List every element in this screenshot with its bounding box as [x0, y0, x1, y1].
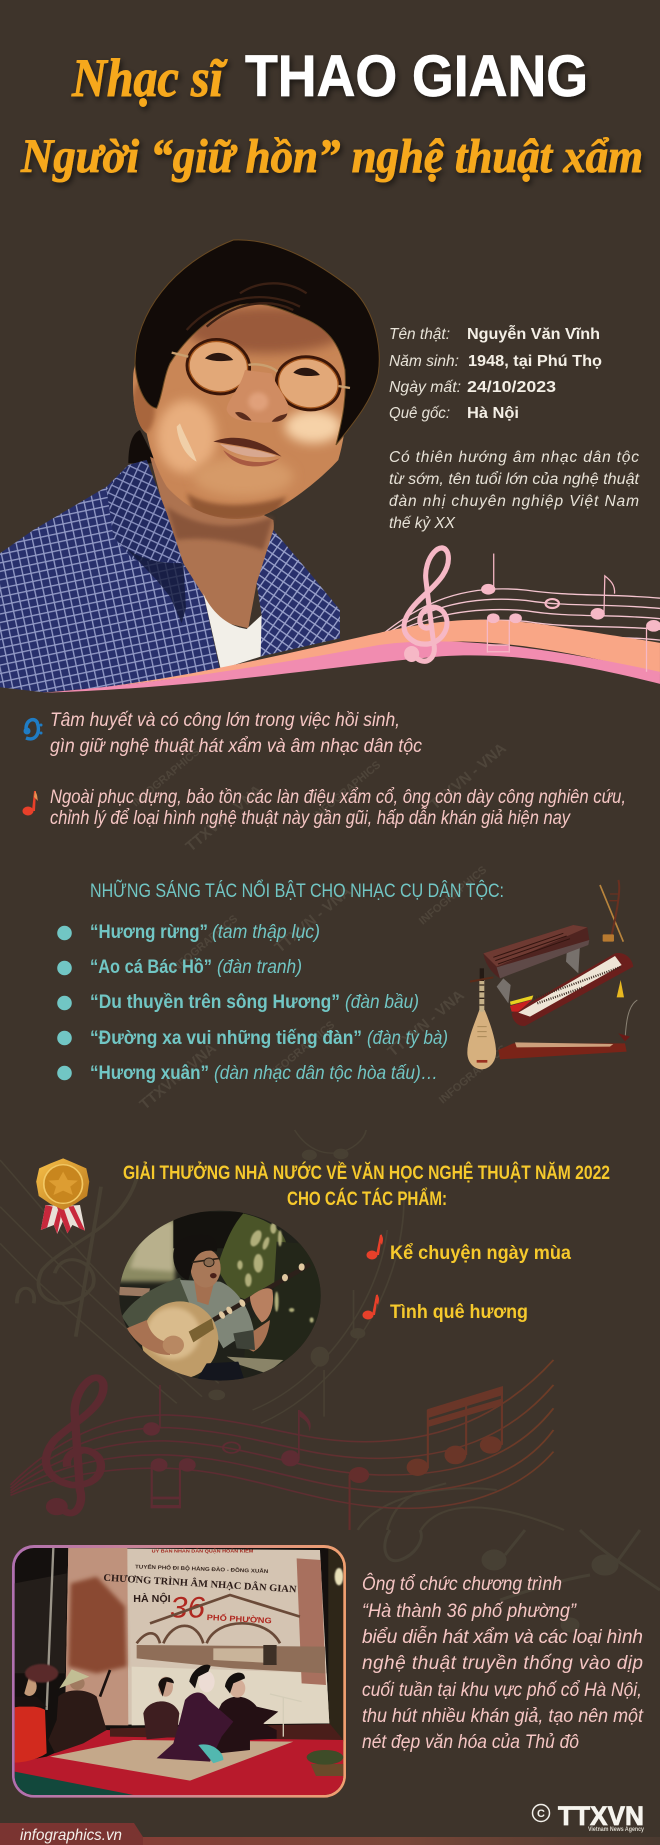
decorative faint watermarks: INFOGRAPHICS	[417, 864, 489, 927]
TTXVN logo: Vietnam News Agency	[588, 1827, 645, 1833]
dark shirt opening	[117, 538, 186, 623]
hair	[173, 1248, 217, 1280]
frame	[12, 1545, 346, 1798]
fan	[198, 1744, 223, 1763]
bottom bar	[0, 1823, 660, 1845]
treble clef	[404, 548, 448, 662]
note stem down	[349, 1467, 369, 1530]
chest	[180, 1280, 254, 1348]
thirty-six string zither	[483, 925, 589, 1003]
decorative faint watermarks: INFOGRAPHICS	[437, 1043, 509, 1106]
fringe strands	[187, 283, 307, 330]
banner right panel	[297, 1558, 326, 1685]
item 4: (đàn tỳ bà)	[367, 1028, 448, 1049]
right dark wall	[328, 1548, 343, 1741]
closing text: cuối tuần tại khu vực phố cổ Hà Nội,	[362, 1680, 642, 1701]
closing text: “Hà thành 36 phố phường”	[362, 1601, 578, 1622]
closing text: biểu diễn hát xẩm và các loại hình	[362, 1627, 643, 1648]
row: home town: Hà Nội	[467, 405, 519, 422]
beamed notes down	[151, 1458, 196, 1508]
main singer	[157, 1692, 233, 1762]
closing text: thu hút nhiều khán giả, tạo nên một	[362, 1706, 644, 1727]
forehead shade	[187, 307, 347, 353]
item 5: (dàn nhạc dân tộc hòa tấu)…	[214, 1063, 438, 1084]
lower banner	[132, 1667, 329, 1725]
item 3: “Du thuyền trên sông Hương”	[90, 992, 340, 1013]
left shirt	[0, 460, 220, 692]
mouth	[213, 438, 282, 457]
chin area	[193, 457, 293, 497]
row: real name: Nguyễn Văn Vĩnh	[467, 326, 600, 343]
state award heading: CHO CÁC TÁC PHẨM:	[287, 1188, 447, 1210]
red stage	[15, 1730, 343, 1795]
faint background notes behind closing text	[385, 1530, 660, 1631]
photo: Ha Noi 36 pho phuong performance: 36	[170, 1591, 205, 1624]
eighth note	[281, 1410, 311, 1466]
neck	[194, 1280, 213, 1305]
callout: research	[22, 787, 626, 829]
microphone stand	[270, 1694, 302, 1737]
title	[20, 44, 643, 183]
decorative faint watermarks: TTXVN - VNA	[137, 1040, 220, 1113]
item 2	[57, 957, 302, 978]
item 4: “Đường xa vui những tiếng đàn”	[90, 1028, 362, 1049]
row: death date: 24/10/2023	[467, 379, 556, 396]
item 1: (tam thập lục)	[212, 922, 320, 943]
nostrils	[235, 412, 287, 422]
faint background music notes	[0, 1130, 564, 1530]
back hair at neck	[128, 430, 157, 463]
photo: Ha Noi 36 pho phuong performance: HÀ NỘI	[133, 1592, 171, 1605]
smile fold	[177, 423, 197, 462]
state award heading	[123, 1162, 610, 1210]
neck	[150, 457, 274, 628]
chin crease	[187, 493, 287, 521]
biography paragraph: thế kỷ XX	[389, 515, 456, 532]
decorative faint watermarks: INFOGRAPHICS	[168, 913, 240, 976]
row: birth year: Năm sinh:	[389, 353, 459, 370]
callout: dedication	[24, 710, 422, 757]
TTXVN logo: C	[537, 1808, 545, 1820]
flowers behind	[25, 1664, 58, 1683]
work 1: Kể chuyện ngày mùa	[390, 1243, 571, 1264]
notes	[481, 554, 660, 672]
banner left panel	[65, 1548, 128, 1725]
row: real name	[389, 326, 600, 343]
banner	[65, 1548, 329, 1725]
collar	[107, 460, 183, 563]
closing text: Ông tổ chức chương trình	[362, 1573, 562, 1595]
sun flecks	[237, 1223, 314, 1323]
ground	[227, 1357, 283, 1373]
icon: bass clef	[24, 720, 42, 739]
trousers	[197, 1362, 245, 1382]
works list	[362, 1234, 571, 1323]
cheek light right	[285, 410, 342, 443]
glasses	[183, 335, 344, 414]
item 2: “Ao cá Bác Hồ”	[90, 957, 212, 978]
face	[133, 304, 345, 519]
personal details	[389, 326, 602, 422]
traditional instruments illustration	[467, 880, 637, 1069]
row: death date	[389, 379, 556, 396]
plucking arm	[127, 1320, 170, 1355]
photo: Ha Noi 36 pho phuong performance: CHƯƠNG TRÌNH ÂM NHẠC DÂN GIAN	[103, 1572, 298, 1596]
zither with white soundboard	[510, 953, 633, 1026]
row: real name: Tên thật:	[389, 326, 450, 343]
closing text	[362, 1573, 644, 1753]
seated woman	[143, 1701, 179, 1739]
work 1	[366, 1234, 571, 1264]
light patch	[130, 1222, 173, 1272]
item 1: “Hương rừng”	[90, 922, 208, 943]
TTXVN logo: TTXVN	[558, 1801, 644, 1831]
fretting hand	[250, 1288, 273, 1322]
decorative faint watermarks	[130, 740, 510, 1113]
decorative faint watermarks: INFOGRAPHICS	[130, 746, 202, 809]
closing text: nghệ thuật truyền thống vào dịp	[362, 1653, 643, 1674]
decorative faint watermarks: INFOGRAPHICS	[311, 759, 383, 822]
foliage	[274, 1242, 287, 1282]
red drum	[15, 1706, 47, 1763]
white tee	[203, 593, 262, 669]
glasses	[192, 1258, 220, 1262]
tuning pegs	[218, 1263, 305, 1320]
tree trunk	[220, 1214, 286, 1300]
arm right	[248, 1320, 270, 1352]
nose	[227, 370, 288, 423]
pole	[47, 1548, 53, 1710]
item 1	[57, 922, 320, 943]
icon: gold medal	[36, 1158, 89, 1234]
flower basket	[311, 1764, 343, 1776]
left lens	[183, 335, 253, 398]
work 2: Tình quê hương	[390, 1302, 528, 1323]
callout: research: chỉnh lý để loại hình nghệ thuật này gần gũi, hấp dẫn khán giả hiện nay	[50, 808, 571, 829]
left building	[15, 1573, 67, 1673]
peach wave and staff decoration	[42, 548, 660, 693]
tab	[0, 1823, 143, 1845]
open mouth	[210, 1273, 217, 1278]
open note	[223, 1442, 240, 1453]
item 5: “Hương xuân”	[90, 1063, 209, 1084]
top staff lines	[375, 589, 660, 644]
photo: Ha Noi 36 pho phuong performance: TUYẾN PHỐ ĐI BỘ HÀNG ĐÀO - ĐỒNG XUÂN	[135, 1562, 269, 1575]
decorative faint watermarks: TTXVN - VNA	[385, 987, 468, 1060]
pink band	[42, 641, 660, 693]
beamed triple notes	[407, 1386, 503, 1476]
row: home town	[389, 405, 519, 422]
right lamp	[335, 1568, 343, 1585]
hair	[135, 240, 379, 445]
compositions list	[57, 922, 448, 1084]
lens rim warm tint	[185, 337, 342, 412]
icon: red note	[22, 791, 38, 816]
left arm and shoulder	[122, 1278, 189, 1328]
dark doorway	[173, 1212, 245, 1248]
sunlit background	[117, 1215, 175, 1282]
title name: THAO GIANG	[245, 44, 588, 109]
right shirt	[257, 530, 340, 657]
biography paragraph: đàn nhị chuyên nghiệp Việt Nam	[389, 493, 639, 510]
monochord	[498, 1000, 637, 1059]
clef foot	[46, 1498, 68, 1515]
lute neck	[213, 1264, 310, 1320]
right lens	[273, 352, 344, 414]
decorative faint watermarks: TTXVN - VNA	[272, 883, 355, 956]
red-tan ledge	[117, 1287, 150, 1297]
row: home town: Quê gốc:	[389, 405, 450, 422]
decorative faint watermarks: TTXVN - VNA	[183, 782, 266, 855]
neck shadow	[167, 507, 273, 550]
site label: infographics.vn	[20, 1827, 122, 1844]
banner headline: UỶ BAN NHÂN DÂN QUẬN HOÀN KIẾM	[152, 1548, 253, 1555]
staff lines	[11, 1360, 553, 1508]
glasses bridge and arms	[172, 353, 350, 388]
decorative faint watermarks: INFOGRAPHICS	[265, 1019, 337, 1082]
pipa lute	[467, 968, 496, 1069]
peach band	[55, 620, 660, 692]
cheek light left	[157, 400, 217, 473]
portrait of Thao Giang	[0, 240, 379, 692]
green skirt	[15, 1772, 133, 1795]
eyes	[205, 353, 320, 376]
item 3: (đàn bầu)	[345, 992, 419, 1013]
heading: notable compositions: NHỮNG SÁNG TÁC NỔI BẬT CHO NHẠC CỤ DÂN TỘC:	[90, 880, 504, 902]
second singer	[203, 1697, 278, 1753]
row: birth year	[389, 353, 602, 370]
callout: dedication: Tâm huyết và có công lớn trong việc hồi sinh,	[50, 710, 400, 731]
work 2	[362, 1294, 528, 1323]
stage back band	[110, 1724, 343, 1740]
ear and side shade	[132, 380, 155, 433]
callout: dedication: gìn giữ nghệ thuật hát xẩm và âm nhạc dân tộc	[50, 736, 422, 757]
biography paragraph: từ sớm, tên tuổi lớn của nghệ thuật	[389, 471, 640, 488]
photo: Ha Noi 36 pho phuong performance	[12, 1545, 346, 1798]
title line 1 label: Nhạc sĩ	[71, 48, 227, 108]
large dark staff with notes	[11, 1360, 553, 1530]
quarter note	[143, 1385, 161, 1436]
erhu	[600, 880, 623, 942]
treble clef	[46, 1378, 103, 1513]
row: birth year: 1948, tại Phú Thọ	[468, 353, 602, 370]
item 5	[57, 1063, 438, 1084]
decorative faint watermarks: TTXVN - VNA	[427, 740, 510, 813]
photo: Ha Noi 36 pho phuong performance: PHỐ PHƯỜNG	[207, 1612, 272, 1625]
row: death date: Ngày mất:	[389, 379, 461, 396]
biography paragraph: Có thiên hướng âm nhạc dân tộc	[389, 449, 639, 466]
circular photo: musician with lute	[117, 1208, 323, 1385]
closing text: nét đẹp văn hóa của Thủ đô	[362, 1732, 579, 1753]
face	[191, 1249, 221, 1288]
left man	[15, 1697, 47, 1707]
seated musician with hat	[48, 1690, 107, 1753]
lute body	[142, 1301, 218, 1379]
carpet	[50, 1740, 293, 1781]
frets	[189, 1318, 214, 1342]
item 2: (đàn tranh)	[217, 957, 302, 978]
station base	[137, 1645, 325, 1673]
biography paragraph	[389, 449, 640, 532]
train station sketch	[137, 1595, 300, 1643]
